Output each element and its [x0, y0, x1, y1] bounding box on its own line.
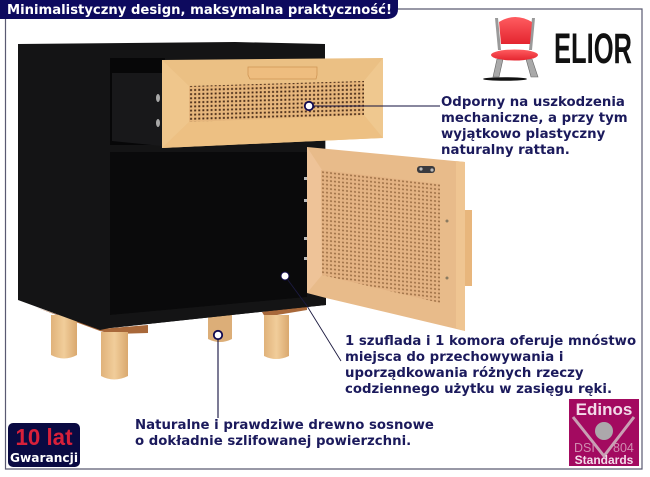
text: wood: o dokładnie szlifowanej powierzchni.	[135, 434, 411, 449]
header title: Minimalistyczny design, maksymalna praktyczność!	[7, 3, 392, 18]
callout line: storage	[281, 272, 341, 361]
drawer handle	[248, 67, 317, 79]
drawer front	[162, 58, 383, 148]
header banner	[0, 0, 398, 19]
door hinges	[304, 177, 308, 260]
text: storage: uporządkowania różnych rzeczy	[345, 365, 584, 381]
text: rattan: naturalny rattan.	[441, 143, 570, 158]
text: storage: miejsca do przechowywania i	[345, 350, 563, 365]
cabinet legs	[35, 304, 307, 380]
text: storage: codziennego użytku w zasięgu ręki.	[345, 382, 612, 397]
product: bedside cabinet	[18, 42, 472, 380]
badge: Edinos standards	[569, 399, 639, 467]
badge: Edinos standards: Edinos	[576, 400, 632, 419]
cabinet interior	[110, 152, 307, 315]
cabinet body	[18, 42, 326, 330]
open door	[307, 147, 472, 331]
text: storage: 1 szuflada i 1 komora oferuje mnóstwo	[345, 333, 636, 349]
badge: 10 year warranty	[8, 423, 80, 467]
text: rattan: Odporny na uszkodzenia	[441, 95, 625, 110]
badge label: Gwarancji: Gwarancji	[10, 451, 78, 465]
drawer side	[112, 73, 162, 146]
text: wood	[135, 418, 434, 449]
drawer rattan panel	[189, 81, 364, 122]
text: rattan: wyjątkowo plastyczny	[441, 127, 606, 142]
badge: Edinos standards: 804	[613, 441, 634, 455]
callout line: rattan	[305, 102, 440, 110]
text: wood: Naturalne i prawdziwe drewno sosnowe	[135, 418, 434, 433]
callout line: wood legs	[214, 331, 222, 418]
logo: chair icon	[483, 17, 538, 81]
text: rattan: mechaniczne, a przy tym	[441, 111, 628, 126]
door latch	[417, 166, 435, 173]
door handle	[465, 210, 472, 286]
text: storage	[345, 333, 636, 397]
text: rattan	[441, 95, 628, 158]
badge: Edinos standards: DSI	[574, 441, 595, 455]
door rattan panel	[321, 170, 440, 303]
badge label: 10 lat: 10 lat	[16, 424, 73, 450]
cabinet bottom panel	[110, 297, 326, 328]
badge: Edinos standards: Standards	[575, 453, 634, 467]
